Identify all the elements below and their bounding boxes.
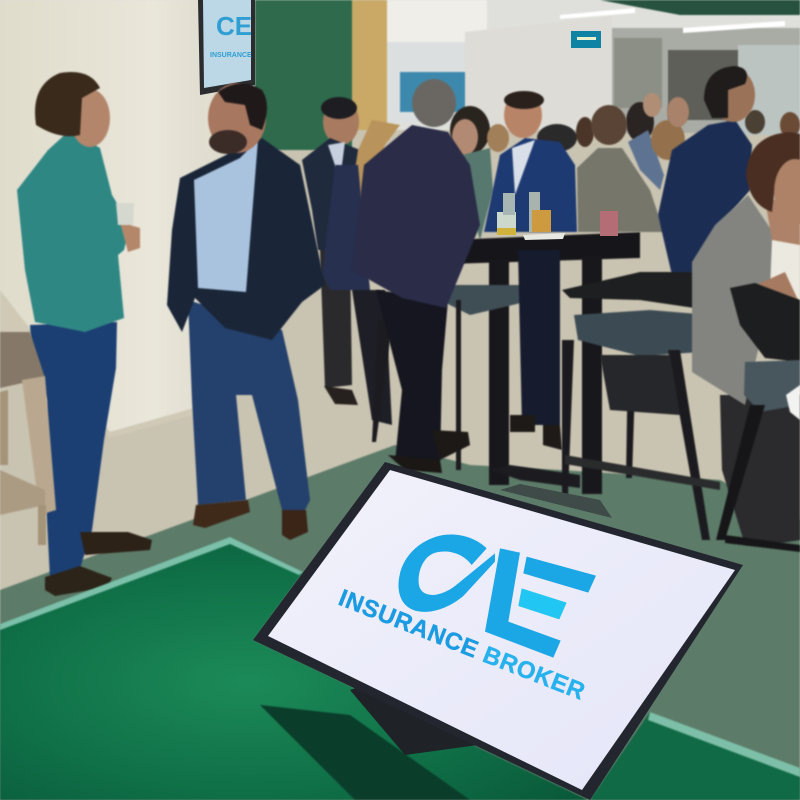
- drinks on table: [497, 192, 618, 240]
- screen stand: [350, 683, 478, 755]
- object behind screen: [500, 484, 612, 518]
- logo wordmark: INSURANCE BROKER: [335, 584, 588, 706]
- man with dark blazer and glasses: [167, 83, 325, 540]
- logo display screen: [253, 462, 743, 800]
- wooden stool at left: [0, 332, 56, 545]
- man with green jacket: [17, 72, 152, 596]
- chair right of table: [562, 272, 720, 540]
- back crowd: [321, 93, 800, 240]
- guest in blue suit: [484, 91, 577, 450]
- high table with chairs: [372, 232, 640, 494]
- wall tv screen: CE: [216, 11, 252, 41]
- foreground rattan chair: [716, 283, 800, 552]
- CE logo mark: [398, 534, 596, 658]
- foreground green table: [0, 537, 800, 800]
- guest in navy blazer from behind: [658, 66, 755, 275]
- wall tv screen: INSURANCE: [210, 52, 252, 59]
- guest in grey jacket from behind: [577, 105, 664, 232]
- wall tv screen: [198, 0, 255, 95]
- woman seated at right: [692, 132, 800, 545]
- carpet floor: [0, 445, 800, 800]
- exit sign: [571, 31, 601, 48]
- guest woman with blond hair: [322, 120, 400, 425]
- guest in navy suit: [302, 138, 362, 405]
- man in grey suit, back view: [352, 79, 480, 473]
